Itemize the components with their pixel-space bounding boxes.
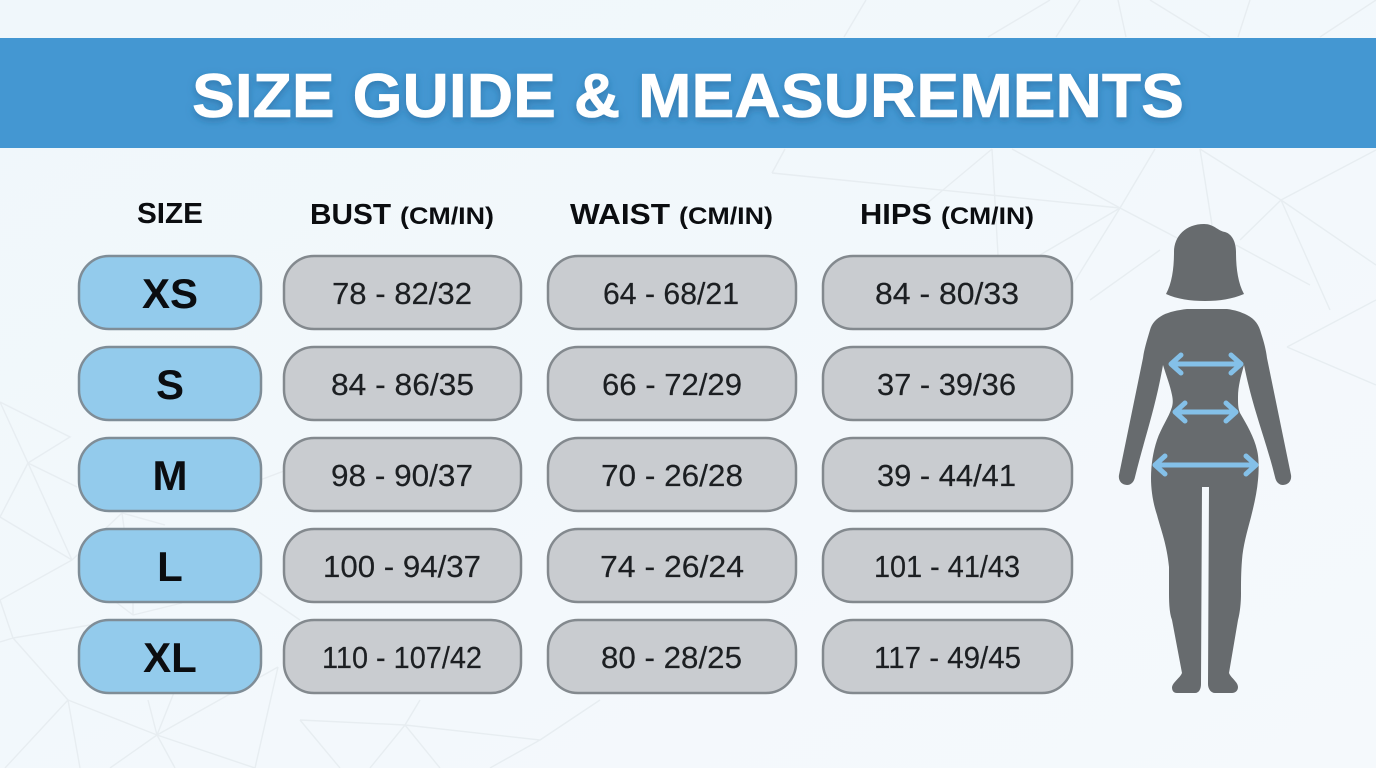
heading: bust xyxy=(310,199,494,231)
heading: bust: (CM/IN) xyxy=(400,203,494,230)
row: XS: 64 - 68/21 xyxy=(603,276,739,311)
row: L: 74 - 26/24 xyxy=(600,549,744,584)
title banner xyxy=(0,38,1376,148)
row: XL: XL xyxy=(143,634,197,681)
row: XL xyxy=(79,620,1072,693)
row: L: L xyxy=(157,543,183,590)
row: L: 100 - 94/37 xyxy=(323,549,481,584)
heading: size: SIZE xyxy=(137,198,203,230)
row: M: 98 - 90/37 xyxy=(331,458,473,493)
row: XL: 117 - 49/45 xyxy=(874,640,1021,675)
row: XS xyxy=(79,256,1072,329)
title: SIZE GUIDE & MEASUREMENTS xyxy=(192,62,1184,131)
heading: waist: (CM/IN) xyxy=(679,203,773,230)
icon: head and hair xyxy=(1166,224,1244,301)
row: S: 84 - 86/35 xyxy=(331,367,474,402)
heading: waist: WAIST xyxy=(570,199,670,231)
row: M: M xyxy=(152,452,188,499)
arrow: bust xyxy=(1171,355,1241,373)
row: L: 101 - 41/43 xyxy=(874,549,1020,584)
figure: body silhouette with measurement arrows xyxy=(1119,224,1291,693)
heading: hips: (CM/IN) xyxy=(941,203,1034,230)
row: M: 39 - 44/41 xyxy=(877,458,1016,493)
row: M xyxy=(79,438,1072,511)
column headings xyxy=(137,198,1034,231)
row: XS: XS xyxy=(142,270,198,317)
row: L xyxy=(79,529,1072,602)
heading: hips: HIPS xyxy=(860,199,932,231)
arrow: hips xyxy=(1155,456,1256,474)
row: XS: 84 - 80/33 xyxy=(875,276,1019,311)
heading: bust: BUST xyxy=(310,199,391,231)
row: XL: 80 - 28/25 xyxy=(601,640,742,675)
row: XL: 110 - 107/42 xyxy=(322,640,482,675)
heading: waist xyxy=(570,199,773,231)
row: S: 66 - 72/29 xyxy=(602,367,742,402)
row: S: 37 - 39/36 xyxy=(877,367,1016,402)
row: M: 70 - 26/28 xyxy=(601,458,743,493)
icon: body xyxy=(1119,309,1291,693)
row: XS: 78 - 82/32 xyxy=(332,276,472,311)
heading: hips xyxy=(860,199,1034,231)
row: S: S xyxy=(156,361,184,408)
arrow: waist xyxy=(1175,403,1236,421)
row: S xyxy=(79,347,1072,420)
